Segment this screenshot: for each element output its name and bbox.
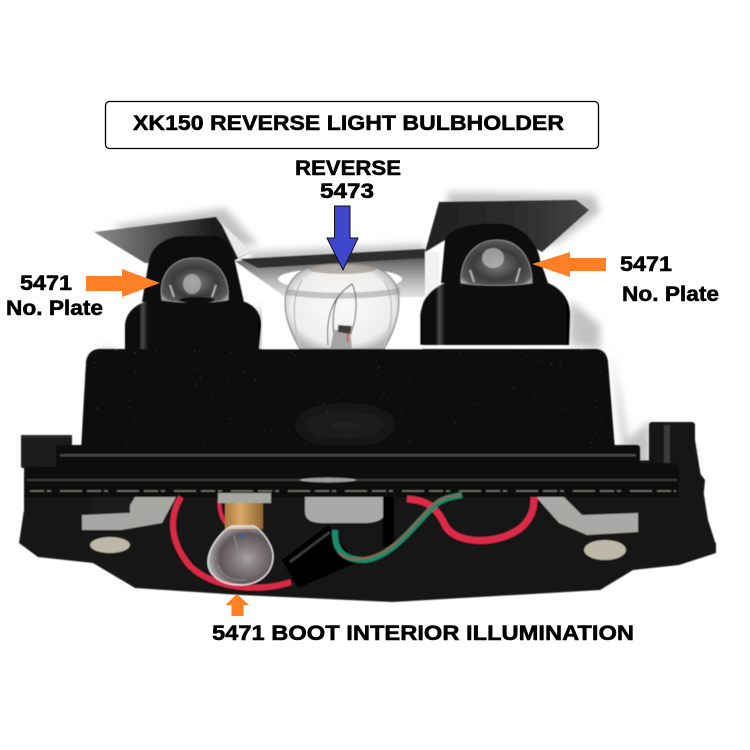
title: XK150 REVERSE LIGHT BULBHOLDER xyxy=(133,112,564,135)
soft shadows behind the assembly xyxy=(100,192,650,470)
label: reverse bulb: REVERSE xyxy=(295,157,401,180)
label: right number plate xyxy=(620,253,719,306)
right lamp: cylinder base xyxy=(420,283,570,345)
mounting post right xyxy=(649,422,716,545)
right grey bracket xyxy=(536,497,638,535)
label: right number plate: 5471 xyxy=(620,253,672,276)
arrow: orange left xyxy=(86,269,160,297)
arrow: orange right xyxy=(532,252,606,277)
left lamp: cylinder base xyxy=(125,302,261,357)
left screw xyxy=(90,537,130,553)
flange xyxy=(56,445,640,469)
left grey bracket xyxy=(82,497,176,530)
white cut-out behind centre bulb xyxy=(278,268,402,290)
arrow: orange boot xyxy=(226,594,249,616)
right screw xyxy=(584,540,626,560)
left lamp: bracket plate xyxy=(94,217,252,263)
arrow: blue reverse xyxy=(327,206,358,270)
bulb: left number plate xyxy=(161,258,228,303)
label: reverse bulb xyxy=(295,157,401,203)
right lamp: bracket plate xyxy=(425,200,589,252)
bulb: boot interior illumination xyxy=(208,493,273,585)
mounting post left xyxy=(21,435,72,468)
label: left number plate: No. Plate xyxy=(6,297,103,320)
green and brown wires xyxy=(335,495,462,560)
base casting xyxy=(19,460,716,602)
red wire right xyxy=(407,497,534,540)
right lamp: socket xyxy=(441,224,548,283)
left lamp: socket xyxy=(142,236,244,302)
label: right number plate: No. Plate xyxy=(622,283,719,306)
heat-shrink sleeve xyxy=(282,525,356,588)
bulb: reverse 5473 xyxy=(285,264,400,349)
main black housing xyxy=(81,349,615,450)
photo: bulbholder assembly xyxy=(19,192,716,602)
centre bracket plate xyxy=(235,250,425,297)
title box xyxy=(106,102,598,148)
housing surface specks xyxy=(81,349,615,450)
lid plate xyxy=(24,463,679,497)
label: boot interior illumination: 5471 BOOT INTERIOR ILLUMINATION xyxy=(212,622,634,645)
label: left number plate: 5471 xyxy=(20,272,72,295)
label: left number plate xyxy=(6,272,103,320)
label: reverse bulb: 5473 xyxy=(320,180,374,203)
red wire left xyxy=(173,497,291,588)
centre grey collar xyxy=(305,497,385,523)
bulb: right number plate xyxy=(461,240,532,285)
